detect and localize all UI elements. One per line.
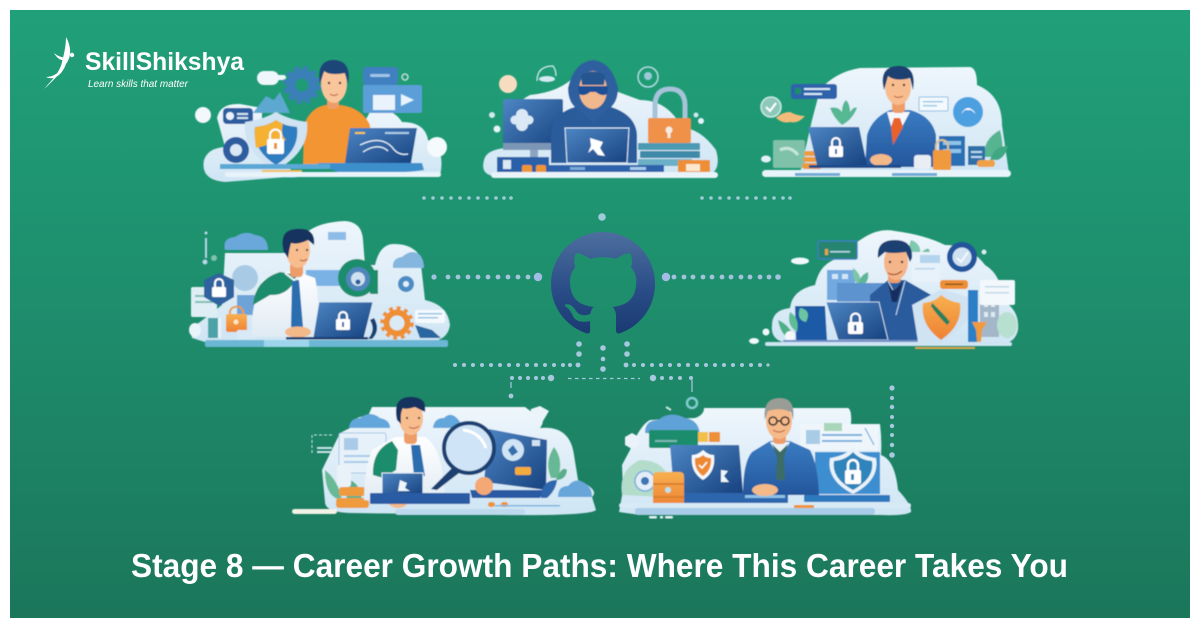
central GitHub logo	[551, 232, 655, 333]
person	[252, 229, 319, 338]
gauge	[953, 97, 983, 127]
gauge bubble	[338, 259, 378, 297]
blue cloud	[224, 233, 268, 250]
plant	[830, 100, 857, 125]
coins	[802, 151, 822, 169]
tagline: Learn skills that matter	[88, 78, 188, 90]
orange lock	[226, 307, 247, 332]
plant and vase	[778, 306, 827, 341]
pin	[687, 398, 697, 408]
person	[364, 397, 446, 508]
illustration: engineer in white shirt	[189, 221, 450, 347]
tablet	[470, 429, 557, 498]
right vertical dots	[889, 385, 895, 458]
left dotted connector	[431, 273, 542, 281]
shield	[829, 447, 877, 494]
brand name: SkillShikshya	[85, 48, 245, 76]
shield	[912, 289, 968, 342]
shield	[204, 273, 234, 306]
hooded figure	[551, 60, 637, 163]
illustration: consultant with headset and shield	[749, 230, 1018, 349]
padlock	[648, 89, 691, 143]
illustration: manager with laptop and orange tie	[761, 66, 1011, 177]
laptop	[808, 127, 901, 168]
laptop	[317, 128, 424, 173]
shield	[245, 112, 307, 170]
laptop	[286, 302, 373, 340]
illustration: reviewer with magnifying glass	[292, 397, 596, 515]
coins	[336, 487, 369, 508]
laptop	[565, 128, 629, 163]
lower dotted connectors	[453, 341, 770, 398]
dotted connector network	[422, 196, 895, 458]
laptop	[783, 302, 918, 345]
person	[743, 398, 819, 496]
illustration: senior leader with shield	[619, 398, 911, 518]
person	[865, 66, 936, 167]
icon: swoosh figure	[44, 37, 74, 89]
person	[303, 60, 372, 165]
title: Stage 8 — Career Growth Paths: Where This Career Takes You	[131, 547, 1068, 584]
person	[870, 240, 933, 340]
barrel	[653, 472, 684, 507]
magnifying glass	[431, 423, 494, 490]
monitor	[670, 445, 788, 503]
chat window	[818, 241, 857, 259]
stacked books	[638, 143, 700, 166]
illustration: analyst with shield and orange shirt	[195, 60, 447, 182]
gear	[382, 308, 412, 338]
illustration: hooded hacker	[483, 60, 718, 178]
monitor	[503, 99, 563, 159]
clock	[947, 242, 977, 272]
right dotted connector	[662, 273, 781, 281]
brand logo	[44, 37, 245, 90]
top dotted connectors	[422, 196, 792, 221]
